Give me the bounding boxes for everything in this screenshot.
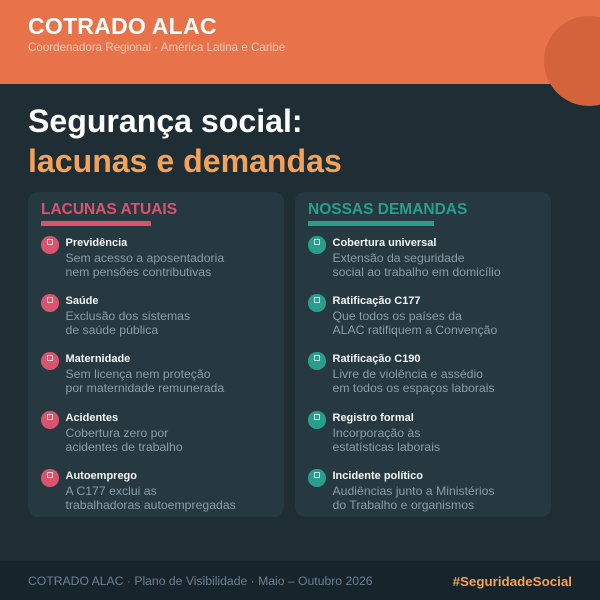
panel: nossas demandas [295, 192, 551, 517]
item: ratificação C190: em todos os espaços laborais [332, 381, 495, 395]
item: autoemprego: A C177 exclui as [66, 484, 157, 498]
item: maternidade: por maternidade remunerada [66, 381, 224, 395]
header band [0, 0, 600, 84]
item: ratificação C177: Ratificação C177 [332, 294, 421, 306]
panel heading: LACUNAS ATUAIS [41, 201, 177, 218]
item: cobertura universal [308, 236, 501, 279]
item: incidente político: Incidente político [332, 470, 423, 482]
item: acidentes: Acidentes [66, 412, 118, 424]
item: previdência: Sem acesso a aposentadoria [66, 251, 224, 265]
item: autoemprego [41, 469, 236, 512]
item: ratificação C190: Ratificação C190 [332, 352, 421, 364]
panel heading: NOSSAS DEMANDAS [308, 201, 467, 218]
title line 1: Segurança social: [28, 103, 303, 139]
item: maternidade [41, 352, 224, 395]
item: ratificação C190 [308, 352, 495, 395]
heading underline [308, 221, 434, 226]
item: cobertura universal: Cobertura universal [332, 236, 436, 248]
item: ratificação C190: Livre de violência e assédio [332, 367, 483, 381]
item: acidentes: acidentes de trabalho [66, 440, 183, 454]
item: acidentes: Cobertura zero por [66, 426, 168, 440]
item: previdência: Previdência [66, 236, 127, 248]
item: saúde: de saúde pública [66, 323, 158, 337]
item: incidente político [308, 469, 495, 512]
decorative circle [544, 16, 600, 106]
item: incidente político: do Trabalho e organismos [332, 498, 474, 512]
item: acidentes [41, 411, 183, 454]
footer band [0, 561, 600, 600]
item: registro formal: estatísticas laborais [332, 440, 440, 454]
header subtitle: Coordenadora Regional · América Latina e Caribe [28, 41, 285, 54]
item: maternidade: Maternidade [66, 352, 130, 364]
heading underline [41, 221, 151, 226]
item: registro formal: Registro formal [332, 412, 414, 424]
item: saúde [41, 294, 190, 337]
item: saúde: Exclusão dos sistemas [66, 309, 190, 323]
item: registro formal [308, 411, 440, 454]
item: incidente político: Audiências junto a Ministérios [332, 484, 495, 498]
main title [28, 103, 342, 179]
item: ratificação C177: Que todos os países da [332, 309, 462, 323]
item: ratificação C177: ALAC ratifiquem a Convenção [332, 323, 497, 337]
item: autoemprego: Autoemprego [66, 470, 137, 482]
item: registro formal: Incorporação às [332, 426, 420, 440]
item: previdência: nem pensões contributivas [66, 265, 211, 279]
footer hashtag: #SeguridadeSocial [453, 574, 572, 589]
item: ratificação C177 [308, 294, 497, 337]
footer credit: COTRADO ALAC · Plano de Visibilidade · Maio – Outubro 2026 [28, 574, 373, 588]
item: cobertura universal: social ao trabalho em domicílio [332, 265, 501, 279]
item: saúde: Saúde [66, 294, 99, 306]
panel: lacunas atuais [28, 192, 284, 517]
header title: COTRADO ALAC [28, 13, 217, 39]
title line 2: lacunas e demandas [28, 143, 342, 179]
item: autoemprego: trabalhadoras autoempregadas [66, 498, 236, 512]
item: cobertura universal: Extensão da seguridade [332, 251, 465, 265]
item: previdência [41, 236, 224, 279]
item: maternidade: Sem licença nem proteção [66, 367, 211, 381]
